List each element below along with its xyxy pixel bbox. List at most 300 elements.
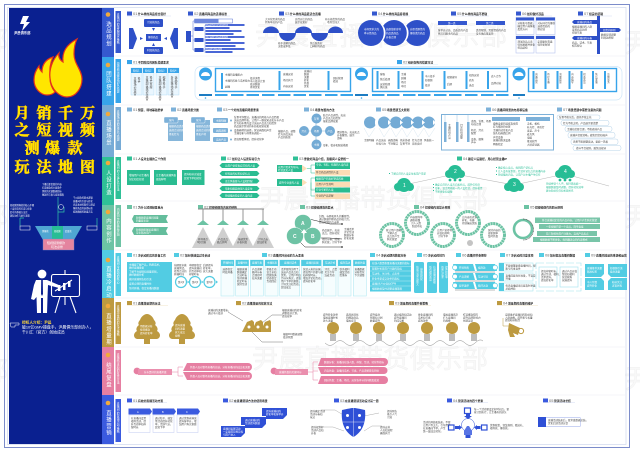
watermark text: 尹晨直播带货俱乐部 [258,184,488,214]
icon: logo [14,16,31,35]
sidebar row 1: 直播间的选品组货策略 [116,12,120,44]
panel: row 2 team building [127,60,622,101]
heading 03: 03 [395,300,400,306]
chart: gears: 价值和共鸣 [437,231,450,235]
chart: stair steps: 提升直播间的 [266,409,282,413]
chart: idea bulb: 第一波成交转化。 [423,429,443,433]
chart: ring and bars: 根据数据不断优化，找到最适合的内容模式 [540,237,588,241]
table: nine columns: 稳定时长 [237,279,248,283]
list: persona pills: 让用户觉得真实可信的人设 [225,164,256,168]
heading 04 [370,252,406,258]
cards: four team stages: 主播副播场控运营 [145,75,149,101]
panel: scene layout: 声音设备 [493,135,504,139]
heading 05: 05 [457,11,462,16]
panel: left title panel [9,8,102,444]
chart: three step rings: 第1步 [178,280,185,284]
diagram: team org chart: 数据 [304,72,310,76]
chart: ABC circles: 封面、标题和开头的重要性， [319,214,352,218]
chart: four wedges: 老客复购 [612,284,623,288]
chart: stair steps [221,408,287,437]
chart: hanging lamps: 价格刺激 [237,240,248,244]
chart: hanging lamps: 引导点击 [258,237,269,241]
diagram: viral video conditions: 下播后要复盘的内容 [42,182,62,186]
cards: two inner boxes: 塑造和福利 [562,272,575,276]
tab: review: 结尾复盘 [105,361,112,388]
diagram: viral video conditions: 起量款 [65,229,72,233]
diagram: viral video conditions: 人设场景的打造与优化 [10,206,33,210]
tab: team building [102,57,114,105]
chart: wave of product types: 毛利空间大 [327,20,340,24]
chart: hanging lamps: 3秒完播 [197,240,206,244]
heading 01: 不同阶段的团队搭建要求 [138,60,169,64]
chart: ABC circles: 购买欲，引导下单 [322,240,343,244]
table: nine columns: 直播节奏 [252,261,263,265]
heading 08 [539,252,575,258]
table: nine columns: 优惠券 [340,273,348,277]
heading 03: 要做好商品介绍，直播间人设要统一 [304,157,349,161]
cards: three activity cards: 升互动率和停 [131,422,147,426]
panel: row 7 growth [127,300,538,346]
chart: light bulbs: 扩大直播间 [443,316,456,320]
chart: ring and bars: 前三秒抓住用户注意力，突出产品卖点 [546,231,589,235]
heading 04: 短视频内容设计原则 [425,206,450,210]
list: scene elements: 商品展示区域的布局和视觉效果 [234,124,270,128]
icon: shield diagram: 吸引人气 [387,412,398,416]
heading 02: 02 [180,252,185,258]
cards: three activity cards: 率，活跃气氛， [155,422,173,426]
chart: light bulbs: 的成交额 [394,318,405,322]
table: nine columns: 秒杀福利 [340,267,350,271]
cards: three roles: 更加鲜明 [156,177,167,181]
tree: selection criteria: 供应链与售后保障 [206,47,222,51]
table: nine columns: 突出产品卖点和 [281,270,299,274]
heading 06: 06 [522,11,527,16]
chart: three step rings: 第2步 [192,280,199,284]
panel: scene layout: 桌面、背景、场景 [471,119,492,123]
cards: three activity cards: A [137,411,139,414]
chart: gears: 让用户觉得有 [437,228,453,232]
heading 03 [293,156,349,161]
chart: hub and spokes [278,113,360,150]
callout: summary: 优化后续活动方案 [548,421,569,425]
chart: hub and spokes: 贴合产品调性，突出 [323,113,346,117]
chart: light bulbs: 增加直播时长 [323,316,339,320]
chart: two trees: 放大成交 [175,330,186,334]
arrows: content reasons: 短视频能够给直播间 [136,228,159,232]
icon: megaphone: 人群画像，提升账号权重 [505,316,533,320]
heading 07: 07 [563,107,568,112]
chart: wave of product types: 售后服务好 [310,41,323,45]
table: nine columns [221,260,366,296]
chart: wave of product types: 易于讲解的商品 [278,41,296,45]
diagram: team org chart: 千川投手 [425,74,436,78]
heading 01 [127,300,168,306]
cards: four grid: 排品结构 [518,46,528,50]
tab: growth: 直播增量期 [105,312,112,346]
text block: cold start [127,262,172,292]
cards: three vertical pills: 拉动直播间数据 [432,265,436,284]
panel: scene layout: 麦克风 [527,132,535,136]
heading 03 [217,107,259,112]
title [14,104,96,176]
heading 07: 组货的逻辑 [589,12,603,16]
chart: scene principles circles [364,116,436,146]
table: nine columns: 分析优化 [354,270,365,274]
chart: scene principles circles: 产品突出 [376,138,387,142]
diagram: persona branches: 提升专业度的人设 [279,180,300,184]
heading 05: 05 [382,107,387,112]
heading 02 [174,252,210,258]
diagram: team org chart: 主播的直播能力 [225,72,243,76]
callout: summary [538,417,588,427]
tab: cold start [102,250,114,299]
sidebar row 5: 内容创作的底层逻辑 [116,207,120,236]
chart: four wedges: 投放流量 [610,270,621,274]
panel: scene layout: 布局合理 [471,122,482,126]
chart: golden houses: 提高效率 [282,314,293,318]
heading 01: 01 [133,204,138,210]
chart: hub and spokes: 灯光 [302,129,307,133]
cards: two inner boxes [536,263,581,291]
diagram: team org chart: 售后处理 [380,77,391,81]
chart: scene principles circles: 色彩协调 [400,138,411,142]
panel: scene layout: 主播的站位和产品 [493,128,514,132]
chart: persona steps path: 持续经营个人IP，保持风格统一 [546,182,581,186]
presenter introduction: 破10亿GMV操盘手，尹晨俱乐部创办人， [22,325,94,330]
chart: golden houses: 直播间的流量增长， [208,308,231,312]
step 4 [555,165,575,181]
diagram: team org chart: 视频编导 [447,75,458,79]
heading 03 [334,398,379,403]
diagram: team org chart: 投放数据 [250,82,261,86]
branch two: 团队复盘：主播、场控、运营各环节的问题及改进 [324,378,380,382]
list: persona pills: 形象和服装体现人设定位 [225,186,253,190]
chart: three circles: 爆款潜力商品 [410,31,426,35]
cards: four team stages: 主播副播场控运营 [158,75,162,101]
cards: four grid: 类目方向 [518,27,528,31]
step 2: 2 [454,169,457,175]
heading 02 [223,398,268,403]
table: nine columns: 拉升流量 [252,276,263,280]
chart: light bulbs: 通过福利和活动 [394,312,412,316]
table: nine columns: 数据确定 [237,270,248,274]
diagram: team org chart: 商务 [469,78,475,82]
sidebar row 8: 直播结束后的复盘方法 [116,352,120,384]
tab: cold start: 直播冷启动 [105,265,112,299]
chart: light bulbs: 提升投放 [370,312,381,316]
watermark text: 尹晨直播带货俱乐部 [255,21,507,51]
chart: three step rings: 转化率， [203,266,213,270]
diagram: viral video conditions: 短视频测爆款 [47,240,65,245]
heading 02: 02 [227,156,232,161]
heading 04 [497,300,538,306]
heading 01 [127,398,167,403]
chart: hub and spokes: 形象、妆容和服装搭配 [323,143,349,147]
diagram: viral video conditions: 测爆款 [42,229,49,233]
cards: four team stages: 主播场控运营 [133,76,137,96]
table: nine columns: 促成成交 [281,285,292,289]
heading 02: 02 [204,204,209,210]
panel: scene layout: 推流软件 [527,139,538,143]
chart: light bulbs: 长期运营 [463,318,474,322]
diagram: persona branches: 以用户需求为导向， [278,165,301,169]
icon: shield diagram: 活动节奏和 [310,412,323,416]
heading 08: 08 [545,252,550,258]
heading 02: 如何让人设更有吸引力 [232,157,260,161]
chart: gears: 能让用户清晰 [386,228,402,232]
sidebar row 1 [116,11,121,53]
diagram: team org chart: 招商选品 [582,72,586,84]
chart: hub and spokes: 摆放整齐，突出卖点 [337,130,360,134]
cards: three vertical pills: 低价福利商品 [428,265,432,282]
table: nine columns: 互动方式 [325,261,336,265]
chart: idea bulb [423,407,525,438]
sidebar row 2 [116,59,121,103]
chart: persona steps path: 持续输出内容，让用户对主播产生信任 [498,172,541,176]
row sidebars [116,11,121,442]
cards: three activity cards: 等活动提升转化 [155,419,173,423]
cards: three outlined notes: 总结经验 [506,286,516,290]
chart: gears: 保持内容的 [488,228,501,232]
list: scene elements: 画面清晰 [216,128,227,132]
chart: scene principles circles: 灯光合理 [412,138,423,142]
chart: two trees: 提升转化率 [140,331,153,335]
diagram: team org chart: 团队管理 [333,76,344,80]
heading 04 [372,11,410,16]
cards: four team stages: 投手 [137,76,141,84]
presenter introduction [10,320,94,334]
cards: four team stages: 阶段2 [145,68,152,72]
tab: marketing [102,395,114,444]
heading 02 [397,60,438,64]
table: nine columns: 直播时长 [238,261,248,265]
heading 05: 05 [423,252,428,258]
heading 07 [500,252,534,258]
cards: scene types: 选择合适的场 [169,128,185,132]
heading 04: 确定人设路径，用心经营主播IP [468,157,507,161]
chart: three step rings: 找到合适的 [174,269,187,273]
heading 01 [127,204,163,210]
diagram: team org chart: 供应链 [380,85,388,89]
heading 03: 03 [223,107,228,112]
presenter introduction: 千川汇（官方）创始成员 [22,330,65,334]
tab: live scene: 直播场景 [105,119,112,147]
chart: light bulbs: 放大流量 [323,318,334,322]
heading 07: 冷启动的注意事项 [511,254,534,258]
icon: shield diagram: 玩法 [310,415,316,419]
heading 05: 05 [530,204,535,210]
chart: product mix cross: 引流款商品 [147,20,160,24]
chart: gears [380,212,504,246]
diagram: signpost: 相互配合 [572,44,583,48]
heading 01 [127,11,171,16]
list: scene elements: 突出产品 [216,138,227,142]
table: nine columns: 选择稳定 [222,267,233,271]
heading 05 [524,204,563,210]
list: stepped notes: 灯光不能太暗，产品展示要清楚 [563,121,599,125]
arrows: content reasons: 的重要来源 [136,219,149,223]
icon: presenter at board [31,270,80,313]
cards: two inner boxes: 营造抢购 [562,275,573,279]
diagram: team org chart: 选品 [469,83,475,87]
icon: megaphone [503,312,533,337]
chart: wave of product types: 有价格优势的商品 [325,17,346,21]
tab: persona [102,157,114,205]
heading 01: 冷启动阶段的准备工作 [138,254,166,258]
chart: stair steps: 通过直播间的 [245,418,261,422]
chart: scene principles circles: 主题明确 [364,138,375,142]
cards: scene types: 室内 [169,118,175,122]
chart: two trees: 用数据分析 [140,324,153,328]
heading 07: 07 [506,252,511,258]
cards: four team stages [131,68,179,101]
list: scene elements: 主播形象与场景协调统一 [234,131,262,135]
table: nine columns: 保持互动 [237,282,248,286]
sidebar row 7 [116,302,121,344]
chart: gears: 卖点并产生 [387,234,400,238]
heading 01: 什么样的商品组合最好 [138,12,166,16]
chart: light bulbs [323,312,483,346]
table: nine columns: 主播状态 [267,261,278,265]
heading 07: 07 [584,11,589,16]
heading 01: 为什么短视频是重点 [138,206,163,210]
heading 04 [304,107,335,112]
diagram: team org chart: 直播运营 [534,72,538,84]
chart: scene principles circles: 音质良好 [412,142,423,146]
chart: gears: 引导下单 [438,234,449,238]
chart: persona steps path: 让人设有故事感，打造有记忆点的直播内容 [498,169,546,173]
panel: scene layout: 灯光摆放的位置 [493,124,511,128]
step 1: 1 [403,183,406,189]
cards: two columns: 第一类 [448,21,456,25]
diagram: viral video conditions: 打造爆款的主要条件 [42,186,62,190]
heading 02: 02 [177,107,182,112]
heading 03: 一个好的直播间场景要素 [228,108,259,112]
icon: shield diagram: 提前规划好 [311,425,324,429]
chart: three step rings: 开播时间 [174,272,185,276]
chart: golden houses: 调整投放计划， [282,311,300,315]
chart: wing rows: 互动引导 [478,274,489,278]
list: scene elements: 提高观看体验，提升转化率 [234,137,265,141]
cards: three outlined notes: 不要频繁更换直播时间，保持 [506,264,539,268]
diagram: persona branches: 专业、有料、有趣的人设内容 [316,162,349,166]
heading 03: 什么样的商品最适合直播 [290,12,321,16]
cards: four team stages: 多主播场控运营 [170,75,174,98]
chart: idea bulb: 每一个活动要设定好时间点，要 [474,407,510,411]
table: nine columns: 合理控时 [252,273,263,277]
heading 02: 02 [403,60,408,64]
panel: row 9 marketing [127,398,588,438]
title: 测爆款 [24,139,83,157]
cards: four grid [516,18,556,53]
heading 05 [543,398,575,403]
heading 07 [557,107,602,112]
branch two [271,358,388,384]
heading 06 [516,11,552,16]
cards: three vertical pills: 快速引流互动留人 [416,265,419,287]
heading 05: 什么样的商品不要碰 [462,12,487,16]
heading 07: 场景搭建中需要注意的问题 [568,108,602,112]
chart: light bulbs: 数量提升 [370,318,381,322]
cards: four grid: 分析账号数据， [518,21,535,25]
panel: scene layout: 补光灯、环形灯 [527,125,545,129]
diagram: persona branches: 专业的产品讲解 [316,194,334,198]
chart: gears: 内容要简单 [410,215,423,219]
panel: scene layout: 主播机位产品 [448,123,451,140]
chart: ring and bars: 符合直播间定位的产品内容，让用户产生购买欲望 [542,218,598,222]
chart: stair steps: 直播间设置活动 [223,426,241,430]
chart: hub and spokes: 产品卖点和优势 [323,116,341,120]
panel: row 3 live scene [127,107,621,150]
chart: ABC circles: B [311,234,315,240]
diagram: persona branches: 让用户产生共鸣 [316,182,334,186]
heading 04 [414,204,450,210]
cards: four team stages: 选品投手 [174,75,178,89]
chart: scene principles circles: 画面清晰 [388,138,399,142]
chart: four wedges: 粉丝关注 [612,280,623,284]
heading 02 [198,204,237,210]
cards: scene types: 根据商品类目 [196,124,212,128]
heading 03: 增量期的直播节奏策略 [400,302,428,306]
heading 03 [300,204,334,210]
icon: role circle 1 [199,68,212,80]
heading 01: 01 [133,252,138,258]
step 2 [445,165,465,181]
diagram: persona branches: 符合商品调性的人设 [316,170,339,174]
heading 05: 冷启动的技巧 [428,254,445,258]
chart: product mix cross [129,19,178,54]
chart: two trees: 找到爆款 [140,328,151,332]
heading 04: 04 [453,398,458,403]
cards: three vertical pills: 停留和转化 [420,267,423,281]
diagram: persona branches: 打造真实人设 [278,168,294,172]
chart: wave of product types [263,17,346,48]
sidebar row 4 [116,157,121,199]
chart: persona steps path: 确定自己的人设方向和特点，提升信任度 [435,182,481,186]
chart: scene principles circles: 风格统一 [424,138,435,142]
cards: three roles: 记忆和信任感 [129,177,145,181]
chart: wave of product types: 决策成本低 [278,44,291,48]
chart: persona steps path: 形象、语言风格统一的人设打造，提升黏性 [435,186,483,190]
chart: three circles [358,20,430,46]
chart: persona steps path: 了解自己的人设定位和用户需求 [391,172,427,176]
cards: scene types [164,117,212,141]
chart: gears: 持续输出优质 [462,221,478,225]
heading 02: 组织架构的搭建方法 [408,60,433,64]
diagram: team org chart: 场控执行 [283,78,294,82]
cards: scene types: 景和产地 [196,132,207,136]
chart: hub and spokes: 背景 [314,116,320,120]
chart: light bulbs: 提高效率 [418,318,429,322]
heading 04: 04 [463,156,468,161]
chart: persona steps path: 不断优化和调整 [435,190,453,194]
chart: three circles: 自带话题性的 [410,27,426,31]
icon: role circle 3 [512,68,526,80]
chart: ABC circles: 主播话术 [344,227,355,231]
cards: three activity cards: 通过秒杀、抽奖 [155,416,173,420]
chart: ring and bars [514,218,600,242]
heading 03: 在直播营销活动设计前一周 [345,399,379,403]
cards: three roles [127,170,204,185]
cards: four team stages: 阶段1 [133,68,140,72]
cards: four grid: 转化数据并优化 [518,42,536,46]
heading 03: 短视频测款的要点 [311,206,334,210]
icon: role circle 2 [355,68,368,80]
diagram: viral video conditions: 团队协作与执行流程 [10,214,30,218]
heading 02 [171,107,199,112]
chart: product mix cross: 利润款商品 [147,48,160,52]
cards: three activity cards: 加用户购买意愿 [179,422,197,426]
